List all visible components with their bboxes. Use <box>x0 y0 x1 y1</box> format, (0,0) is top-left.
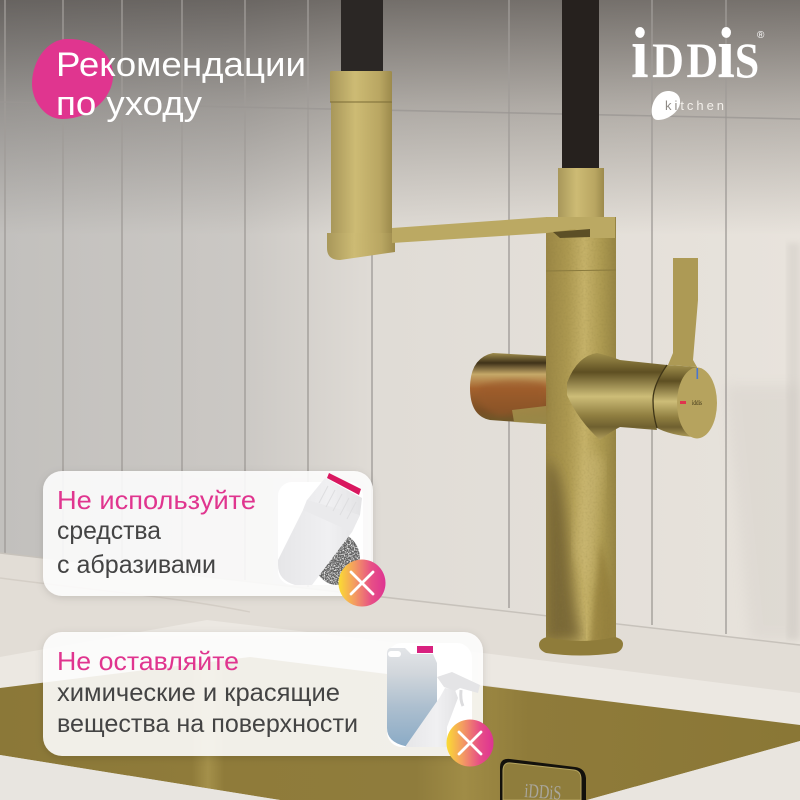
handle marks: iddis <box>692 399 702 407</box>
logo: IDDIS kitchen <box>631 13 765 120</box>
right handle <box>567 353 717 440</box>
title: по уходу <box>56 85 202 123</box>
main body <box>546 217 616 645</box>
body text: с абразивами <box>57 551 216 579</box>
icon: canister and spray bottle <box>387 643 480 747</box>
body text: химические и красящие <box>57 679 340 707</box>
kitchen blob <box>652 91 680 120</box>
body text <box>57 517 216 579</box>
faucet foot <box>539 637 623 656</box>
title: Рекомендации <box>56 46 306 84</box>
logo wordmark: i <box>631 13 649 93</box>
countertop and sink <box>0 553 800 800</box>
logo wordmark: D <box>652 33 684 89</box>
icon: cleaning powder and steel wool <box>278 473 363 585</box>
logo wordmark: S <box>735 33 759 89</box>
sink logo plate <box>500 759 586 800</box>
body text: вещества на поверхности <box>57 710 358 738</box>
logo wordmark: i <box>717 13 735 93</box>
card background <box>43 471 373 596</box>
spout arm <box>392 217 615 243</box>
card background <box>43 632 483 756</box>
black hose right <box>562 0 599 170</box>
neck collar <box>558 168 604 217</box>
body text <box>57 679 358 738</box>
kitchen word: kitchen <box>665 98 724 113</box>
lever <box>668 258 698 367</box>
black hose left <box>341 0 383 73</box>
sprayer head <box>327 71 395 260</box>
heading: Не оставляйте <box>57 646 239 676</box>
registered mark: ® <box>757 30 765 41</box>
logo wordmark: D <box>686 33 718 89</box>
faucet <box>327 0 717 656</box>
title blob <box>32 39 113 119</box>
left knob <box>470 353 546 424</box>
icon: prohibited badge <box>446 720 494 766</box>
panel: do not use abrasives <box>43 471 386 606</box>
handle marks <box>680 368 702 407</box>
body text: средства <box>57 517 161 545</box>
title <box>56 46 306 123</box>
heading: Не используйте <box>57 485 256 515</box>
icon: prohibited badge <box>338 560 386 606</box>
panel: do not leave chemicals <box>43 632 494 766</box>
